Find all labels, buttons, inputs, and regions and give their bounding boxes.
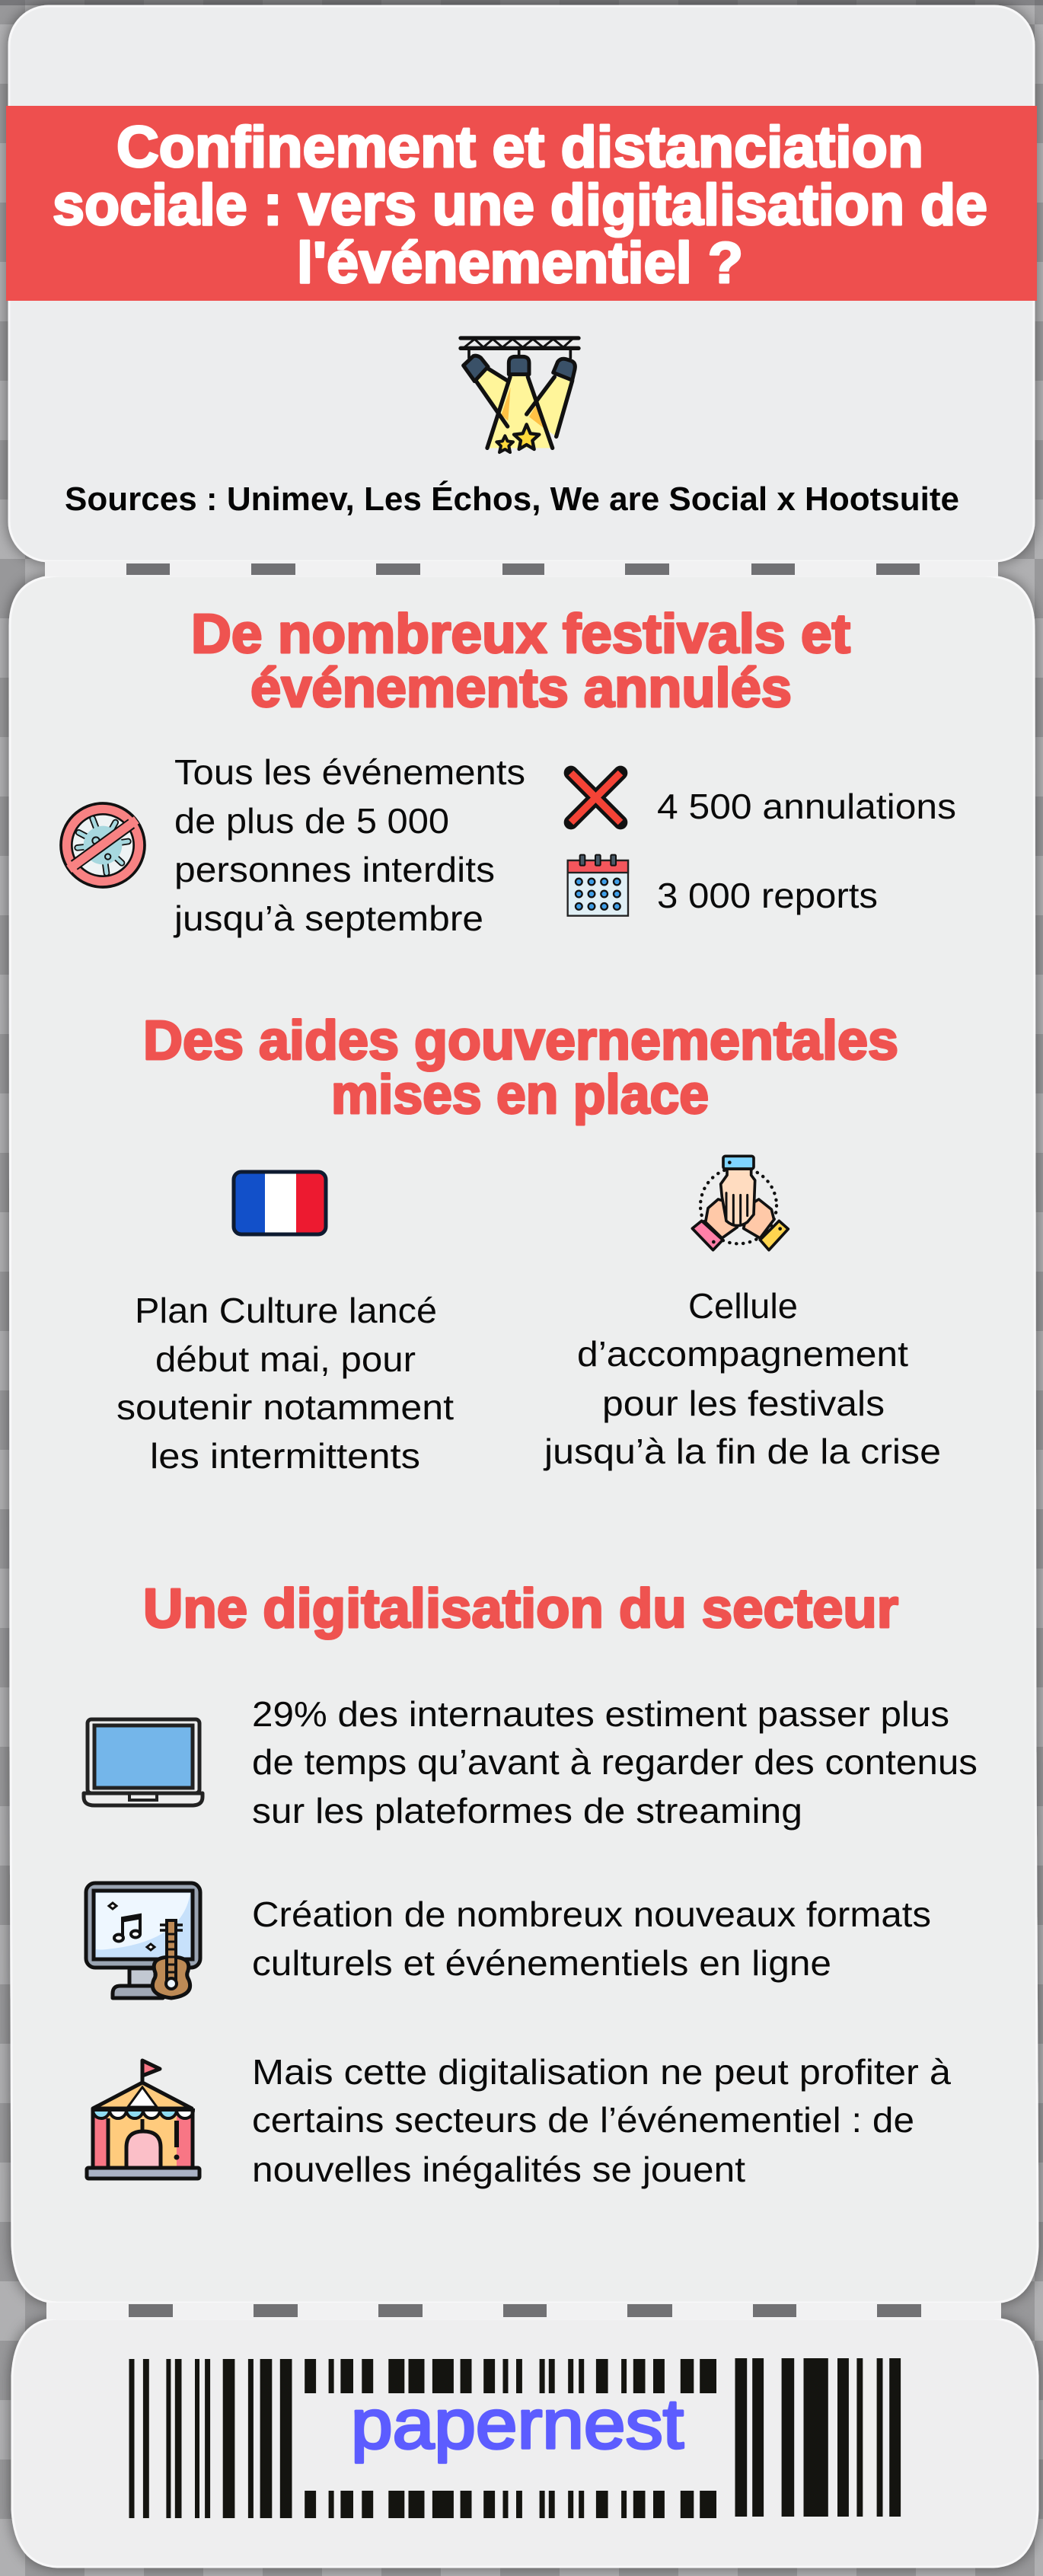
logo: papernest: papernest bbox=[351, 2386, 684, 2463]
icon: monitor with guitar bbox=[86, 1883, 200, 1998]
text: Plan Culture: début mai, pour bbox=[155, 1339, 416, 1379]
icon: circus tent bbox=[87, 2060, 199, 2179]
text: événements interdits: de plus de 5 000 bbox=[174, 801, 449, 841]
text: nouveaux formats: culturels et événementiels en ligne bbox=[252, 1943, 831, 1983]
panel: main content bbox=[10, 576, 1038, 2303]
text: streaming: 29% des internautes estiment passer plus bbox=[252, 1694, 949, 1734]
header card bbox=[9, 6, 1034, 561]
title bbox=[6, 106, 1037, 301]
icon: laptop bbox=[84, 1719, 203, 1805]
ticket connector: bottom bbox=[46, 2303, 1001, 2319]
footer card bbox=[12, 2319, 1038, 2567]
text: Plan Culture bbox=[116, 1291, 454, 1476]
text: événements interdits: personnes interdits bbox=[174, 850, 495, 889]
text: inégalités: certains secteurs de l’événementiel : de bbox=[252, 2100, 914, 2140]
text: événements interdits: jusqu’à septembre bbox=[173, 899, 483, 938]
text: inégalités: Mais cette digitalisation ne peut profiter à bbox=[252, 2052, 951, 2092]
heading: aides gouvernementales: Des aides gouvernementales bbox=[143, 1010, 898, 1071]
icon: French flag bbox=[234, 1172, 326, 1234]
heading: festivals annulés: De nombreux festivals et bbox=[191, 604, 850, 665]
sources line: Sources : Unimev, Les Échos, We are Social x Hootsuite bbox=[65, 480, 959, 518]
icon: stage spotlights bbox=[461, 338, 579, 452]
text: cellule d'accompagnement: jusqu’à la fin de la crise bbox=[543, 1432, 941, 1471]
barcode bbox=[129, 2358, 901, 2518]
heading: aides gouvernementales bbox=[143, 1010, 898, 1125]
panel: barcode footer bbox=[12, 2319, 1038, 2567]
title: sociale : vers une digitalisation de bbox=[53, 173, 987, 238]
text: cellule d'accompagnement bbox=[543, 1286, 941, 1471]
section: cancelled events bbox=[61, 604, 956, 938]
icon: virus forbidden bbox=[61, 803, 145, 887]
ticket connector: top bbox=[45, 561, 998, 576]
text: nouveaux formats bbox=[252, 1894, 931, 1983]
text: inégalités: nouvelles inégalités se jouent bbox=[252, 2150, 745, 2189]
heading: aides gouvernementales: mises en place bbox=[331, 1065, 709, 1125]
text: nouveaux formats: Création de nombreux nouveaux formats bbox=[252, 1894, 931, 1934]
text: inégalités bbox=[252, 2052, 951, 2189]
icon: calendar bbox=[568, 855, 628, 916]
stat: annulations: 4 500 annulations bbox=[657, 787, 956, 826]
icon: red cross bbox=[571, 773, 620, 822]
text: événements interdits: Tous les événements bbox=[174, 752, 525, 792]
heading: festivals annulés: événements annulés bbox=[250, 658, 792, 719]
heading: festivals annulés bbox=[191, 604, 850, 719]
icon: joined hands bbox=[692, 1156, 788, 1250]
stat: reports: 3 000 reports bbox=[657, 876, 878, 915]
main card bbox=[10, 576, 1038, 2303]
section: digitalisation bbox=[84, 1578, 978, 2189]
text: cellule d'accompagnement: Cellule bbox=[688, 1286, 798, 1326]
text: streaming bbox=[252, 1694, 978, 1831]
text: Plan Culture: les intermittents bbox=[150, 1436, 420, 1476]
section: government aid bbox=[116, 1010, 941, 1476]
heading: digitalisation du secteur: Une digitalisation du secteur bbox=[143, 1578, 898, 1639]
text: cellule d'accompagnement: d’accompagnement bbox=[577, 1334, 908, 1374]
text: Plan Culture: Plan Culture lancé bbox=[135, 1291, 437, 1330]
title: Confinement et distanciation bbox=[116, 115, 923, 180]
text: événements interdits bbox=[173, 752, 525, 938]
title: l'événementiel ? bbox=[297, 231, 743, 295]
panel: header bbox=[6, 6, 1037, 561]
text: cellule d'accompagnement: pour les festivals bbox=[602, 1384, 885, 1423]
text: streaming: de temps qu’avant à regarder des contenus bbox=[252, 1742, 978, 1782]
text: streaming: sur les plateformes de streaming bbox=[252, 1791, 802, 1831]
text: Plan Culture: soutenir notamment bbox=[116, 1387, 454, 1427]
